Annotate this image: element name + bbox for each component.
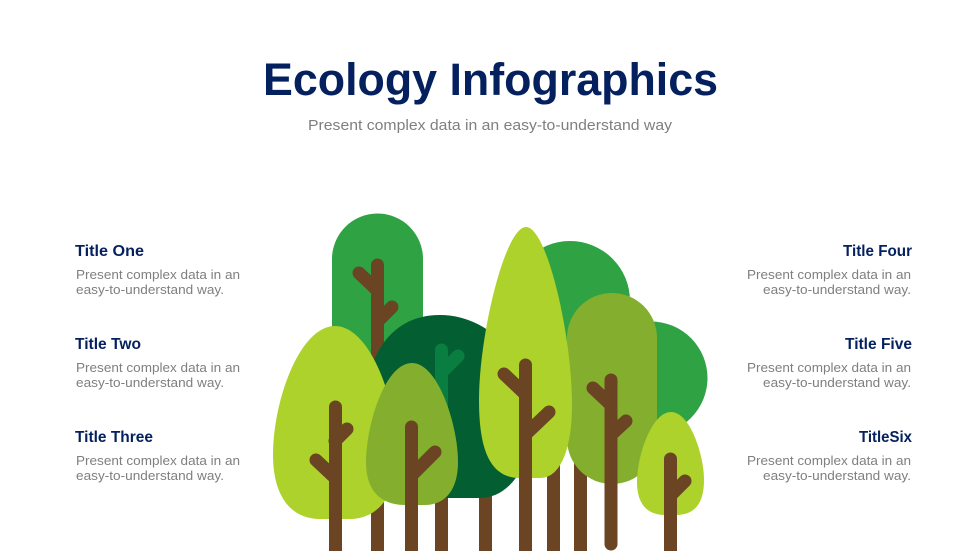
text block: Title Three: Present complex data in an [76, 454, 240, 468]
illustration: forest of trees [273, 214, 708, 551]
tree: green circle back [510, 241, 630, 551]
tree: lime small right [637, 412, 704, 551]
text block: Title Three [75, 429, 240, 483]
tree: olive small [366, 363, 458, 551]
tree: lime tall [479, 227, 572, 551]
text block: Title Four: Present complex data in an [747, 268, 911, 282]
text block: Title Two: easy-to-understand way. [76, 376, 224, 390]
text block: TitleSix [747, 429, 912, 483]
text block: Title Three: easy-to-understand way. [76, 469, 224, 483]
text block: TitleSix: easy-to-understand way. [763, 469, 911, 483]
text block: Title Four: easy-to-understand way. [763, 283, 911, 297]
text block: Title One: Present complex data in an [76, 268, 240, 282]
tree: tall green rounded [332, 214, 423, 551]
text block: Title One: easy-to-understand way. [76, 283, 224, 297]
tree: dark green [358, 315, 532, 551]
tree: olive rounded [567, 293, 657, 551]
text block: Title Three: Title Three [75, 429, 153, 446]
text block: TitleSix: TitleSix [859, 429, 912, 446]
tree: green circle right [594, 322, 708, 434]
text block: Title Two [75, 336, 240, 390]
text block: Title Five [747, 336, 912, 390]
text block: Title Five: easy-to-understand way. [763, 376, 911, 390]
title: Ecology Infographics [263, 54, 718, 105]
tree: lime large left [273, 326, 397, 551]
text block: Title Five: Title Five [845, 336, 912, 353]
text block: Title One [75, 243, 240, 297]
text block: TitleSix: Present complex data in an [747, 454, 911, 468]
text block: Title Four [747, 243, 912, 297]
text block: Title One: Title One [75, 243, 144, 260]
subtitle: Present complex data in an easy-to-understand way [308, 118, 673, 134]
text block: Title Two: Present complex data in an [76, 361, 240, 375]
text block: Title Two: Title Two [75, 336, 141, 353]
text block: Title Four: Title Four [843, 243, 912, 260]
text block: Title Five: Present complex data in an [747, 361, 911, 375]
